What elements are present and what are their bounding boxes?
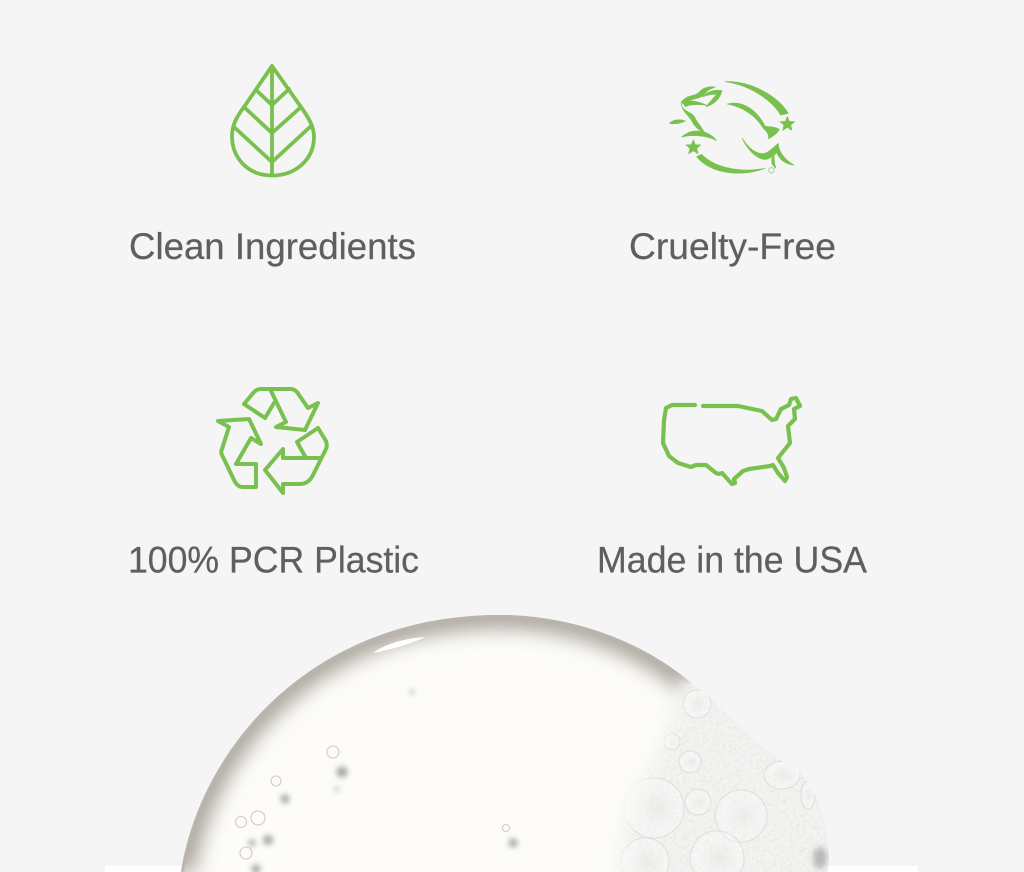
blurred specks	[248, 690, 518, 872]
icon: leaf (Clean Ingredients)	[232, 66, 314, 176]
panel: white base strip	[105, 866, 918, 872]
icon: recycling arrows (100% PCR Plastic)	[218, 389, 327, 493]
image: gel droplet with foam	[170, 605, 840, 872]
heading: Cruelty-Free: Cruelty-Free	[629, 226, 836, 267]
icon: leaping rabbit (Cruelty-Free)	[669, 82, 795, 173]
highlight	[373, 637, 426, 653]
heading: Made in the USA: Made in the USA	[597, 540, 867, 580]
heading: Clean Ingredients: Clean Ingredients	[129, 226, 416, 267]
bubbles	[236, 746, 510, 859]
heading: 100% PCR Plastic: 100% PCR Plastic	[128, 540, 419, 580]
icon: USA outline (Made in the USA)	[663, 398, 800, 484]
